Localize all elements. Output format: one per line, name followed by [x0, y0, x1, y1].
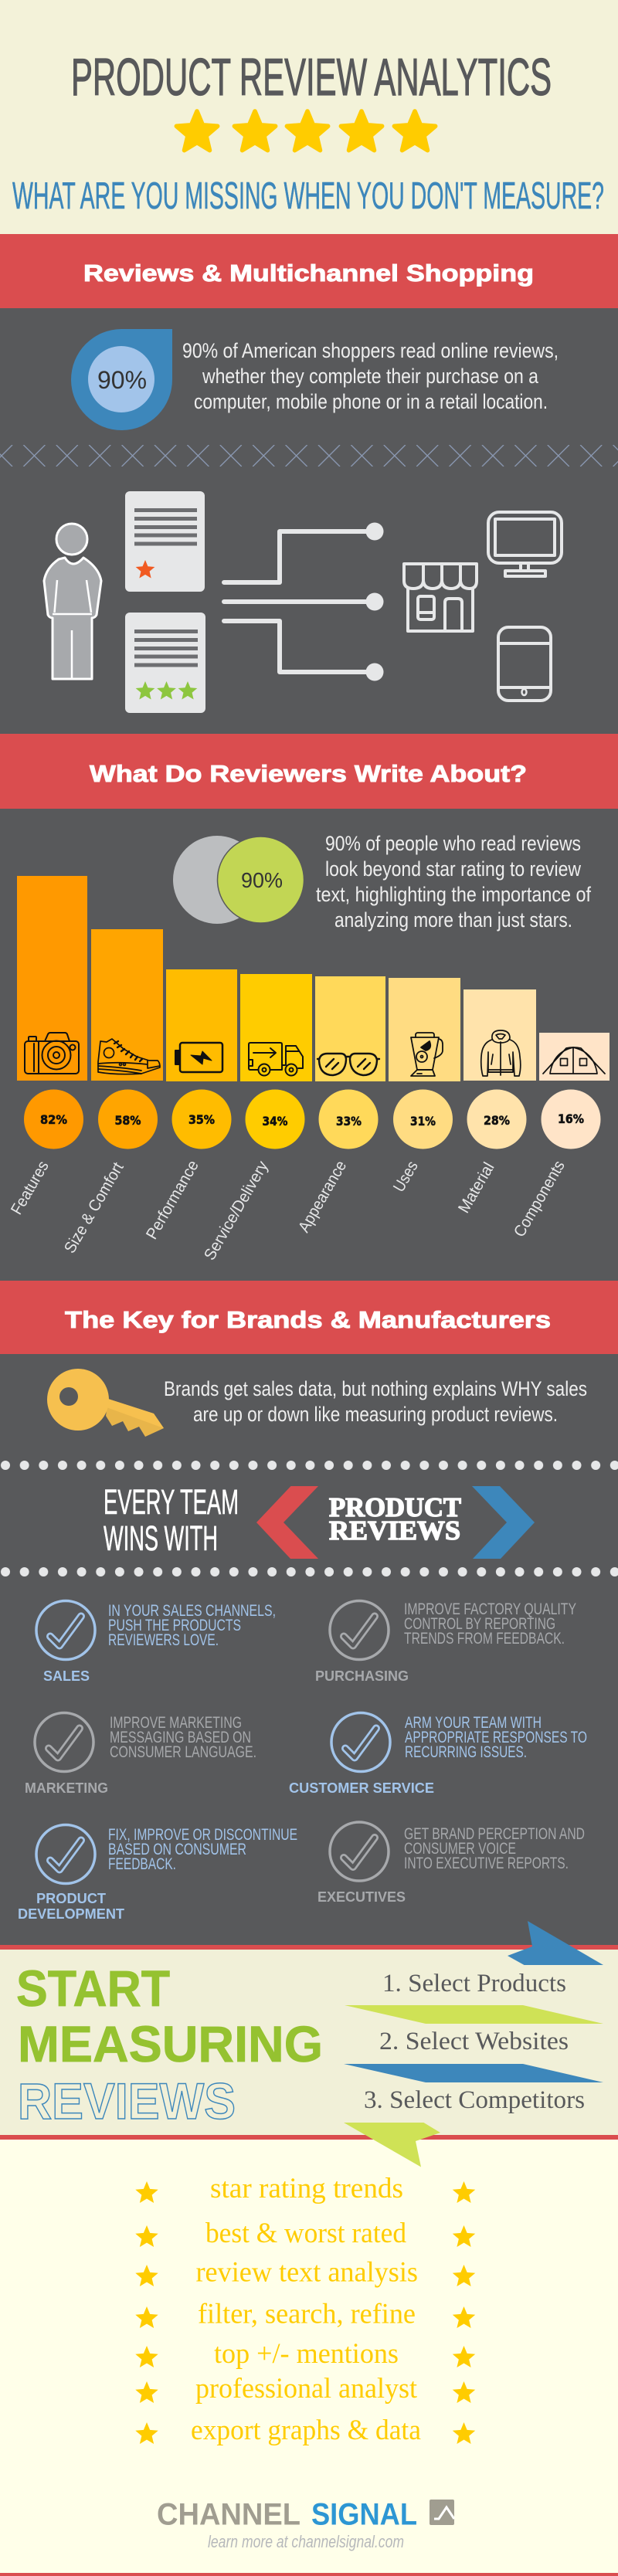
bar: appearance: [315, 976, 385, 1081]
text block: beyond star rating: [316, 832, 591, 932]
feature: best and worst rated: [135, 2218, 475, 2249]
bar: components: [539, 1033, 610, 1081]
value: 33%: [318, 1089, 379, 1149]
team: customer service: CUSTOMER SERVICE: [289, 1780, 434, 1796]
value: 16%: 16%: [558, 1112, 584, 1126]
step two: 2. Select Websites: [379, 2028, 569, 2055]
ribbon: blue divider: [344, 2064, 603, 2082]
text block: American shoppers: whether they complete their purchase on a: [202, 365, 539, 388]
value: 33%: 33%: [336, 1114, 362, 1128]
feature: review text analysis: [135, 2257, 475, 2288]
decorative bottom rule: [0, 2573, 618, 2576]
icon: overlapping 90% circles: 90%: [241, 868, 283, 892]
panel: start measuring background: [0, 1945, 618, 2140]
team: sales: REVIEWERS LOVE.: [108, 1631, 219, 1649]
team: purchasing: TRENDS FROM FEEDBACK.: [404, 1630, 565, 1648]
icon: 90% drop badge: 90%: [97, 366, 147, 394]
icon: store: [404, 564, 477, 631]
rotated category labels: Appearance: [295, 1158, 350, 1236]
heading: every team wins with: WINS WITH: [104, 1519, 218, 1558]
team: sales: [36, 1600, 276, 1684]
value: 34%: 34%: [263, 1114, 287, 1128]
feature: top mentions: [135, 2338, 475, 2370]
value: 82%: [24, 1089, 83, 1149]
team: executives: CONSUMER VOICE: [404, 1840, 516, 1858]
panel: section three heading: [0, 1281, 618, 1354]
panel: section one heading: [0, 234, 618, 308]
icon: three-star review card: [125, 613, 205, 713]
panel: section two heading: What Do Reviewers Write About?: [90, 760, 527, 787]
icon: 90% drop badge: [71, 329, 172, 430]
feature: star rating trends: star rating trends: [210, 2173, 403, 2204]
feature list with stars: [135, 2173, 475, 2446]
heading: product reviews: REVIEWS: [329, 1515, 460, 1546]
text block: beyond star rating: analyzing more than just stars.: [334, 908, 572, 932]
rotated category labels: Components: [511, 1158, 569, 1240]
heading: start measuring reviews: [16, 1960, 323, 2130]
bar: features: [17, 876, 87, 1081]
value: 35%: [171, 1089, 232, 1149]
icon: gold key: [47, 1369, 164, 1437]
value: 58%: [98, 1089, 158, 1149]
rotated category labels: Material: [455, 1159, 498, 1216]
ribbon: green bottom: [344, 2123, 440, 2167]
bar: uses: [389, 978, 460, 1081]
team: sales: PUSH THE PRODUCTS: [108, 1617, 241, 1634]
team: sales: IN YOUR SALES CHANNELS,: [108, 1602, 276, 1620]
value: 28%: [467, 1089, 527, 1149]
team: customer service: ARM YOUR TEAM WITH: [405, 1714, 542, 1732]
rotated category labels: Performance: [143, 1157, 202, 1242]
text block: beyond star rating: 90% of people who read reviews: [325, 832, 581, 855]
team: marketing: MESSAGING BASED ON: [110, 1729, 251, 1746]
bar chart: review topics: [17, 876, 610, 1081]
text block: brands get sales data: are up or down like measuring product reviews.: [193, 1403, 558, 1426]
value: 16%: [541, 1089, 601, 1149]
rotated category labels: Uses: [390, 1158, 422, 1195]
icon: desktop monitor: [488, 512, 562, 576]
arrow: blue chevron: [472, 1486, 535, 1559]
value: 34%: [246, 1089, 304, 1149]
connector arrows to channels: [224, 522, 383, 681]
feature: filter search refine: filter, search, refine: [198, 2299, 416, 2330]
bar: material: [464, 989, 536, 1081]
feature: filter search refine: [135, 2299, 475, 2330]
team: product development: DEVELOPMENT: [18, 1906, 124, 1922]
rotated category labels: Features: [8, 1158, 53, 1217]
team: customer service: RECURRING ISSUES.: [405, 1743, 527, 1761]
team: product development: FEEDBACK.: [108, 1855, 176, 1873]
team: executives: EXECUTIVES: [317, 1889, 406, 1905]
team: marketing: [25, 1713, 256, 1796]
value: 35%: 35%: [188, 1112, 215, 1127]
text block: American shoppers: 90% of American shoppers read online reviews,: [182, 339, 559, 362]
text block: American shoppers: computer, mobile phone or in a retail location.: [194, 390, 548, 413]
value: 82%: 82%: [40, 1112, 67, 1127]
panel: dark body background: [0, 308, 618, 1946]
rotated category labels: [8, 1157, 569, 1264]
icon: mobile phone: [498, 627, 551, 701]
heading: every team wins with: [104, 1482, 239, 1558]
ribbon: green divider: [345, 2005, 603, 2024]
team: product development: FIX, IMPROVE OR DISCONTINUE: [108, 1826, 297, 1844]
arrow: red chevron: [256, 1486, 318, 1559]
logo: channel signal: SIGNAL: [311, 2498, 417, 2532]
feature: star rating trends: [135, 2173, 475, 2204]
team: marketing: MARKETING: [25, 1780, 108, 1796]
feature: top mentions: top +/- mentions: [214, 2338, 399, 2370]
value: 28%: 28%: [484, 1113, 510, 1128]
team: marketing: IMPROVE MARKETING: [110, 1714, 242, 1732]
icon: one-star review card: [125, 491, 205, 592]
icon: overlapping 90% circles: [173, 836, 304, 924]
feature: best and worst rated: best & worst rated: [205, 2218, 406, 2249]
panel: section one heading: Reviews & Multichannel Shopping: [83, 260, 534, 287]
rotated category labels: Size & Comfort: [61, 1159, 127, 1256]
text block: beyond star rating: look beyond star rating to review: [325, 857, 581, 881]
team: product development: PRODUCT: [36, 1891, 106, 1906]
bar: service and delivery: [240, 974, 312, 1081]
team: purchasing: CONTROL BY REPORTING: [404, 1615, 555, 1633]
heading: start measuring reviews: REVIEWS: [18, 2072, 236, 2130]
heading: every team wins with: EVERY TEAM: [104, 1482, 239, 1522]
value: 31%: [393, 1089, 453, 1149]
heading: product reviews: PRODUCT: [329, 1492, 461, 1522]
icon: five rating stars: [176, 111, 436, 151]
panel: feature list background: [0, 2140, 618, 2576]
footer link text: learn more at channelsignal.com: [208, 2532, 404, 2551]
feature: professional analyst: [135, 2373, 475, 2405]
value: 31%: 31%: [410, 1114, 436, 1128]
feature: professional analyst: professional analyst: [195, 2373, 418, 2405]
rotated category labels: Service/Delivery: [201, 1158, 272, 1264]
bar: performance: [166, 969, 237, 1081]
panel: section two heading: [0, 734, 618, 809]
team: marketing: CONSUMER LANGUAGE.: [110, 1743, 256, 1761]
step one: 1. Select Products: [382, 1970, 566, 1997]
heading: start measuring reviews: START: [16, 1960, 170, 2017]
text block: brands get sales data: [164, 1377, 587, 1426]
feature: review text analysis: review text analysis: [196, 2257, 418, 2288]
team: sales: SALES: [43, 1668, 90, 1684]
team: purchasing: PURCHASING: [315, 1668, 409, 1684]
percentage circles: [24, 1089, 601, 1149]
team: executives: [317, 1822, 585, 1905]
feature: export graphs and data: export graphs & data: [191, 2415, 421, 2446]
bar: size and comfort: [91, 929, 163, 1081]
value: 58%: 58%: [114, 1113, 141, 1128]
panel: section three heading: The Key for Brands & Manufacturers: [65, 1306, 551, 1333]
logo: channel signal: [157, 2498, 454, 2532]
team: customer service: [289, 1713, 587, 1796]
icon: shopper figure: [44, 524, 101, 679]
team: purchasing: [315, 1600, 576, 1684]
step three: 3. Select Competitors: [364, 2086, 585, 2114]
text block: American shoppers: [182, 339, 559, 413]
team: product development: BASED ON CONSUMER: [108, 1841, 246, 1858]
logo: channel signal: CHANNEL: [157, 2498, 301, 2532]
panel: header background: [0, 0, 618, 234]
team: product development: [18, 1824, 297, 1922]
heading: start measuring reviews: MEASURING: [18, 2015, 323, 2072]
heading: product reviews: [329, 1492, 461, 1546]
ribbon: blue top: [508, 1921, 603, 1965]
